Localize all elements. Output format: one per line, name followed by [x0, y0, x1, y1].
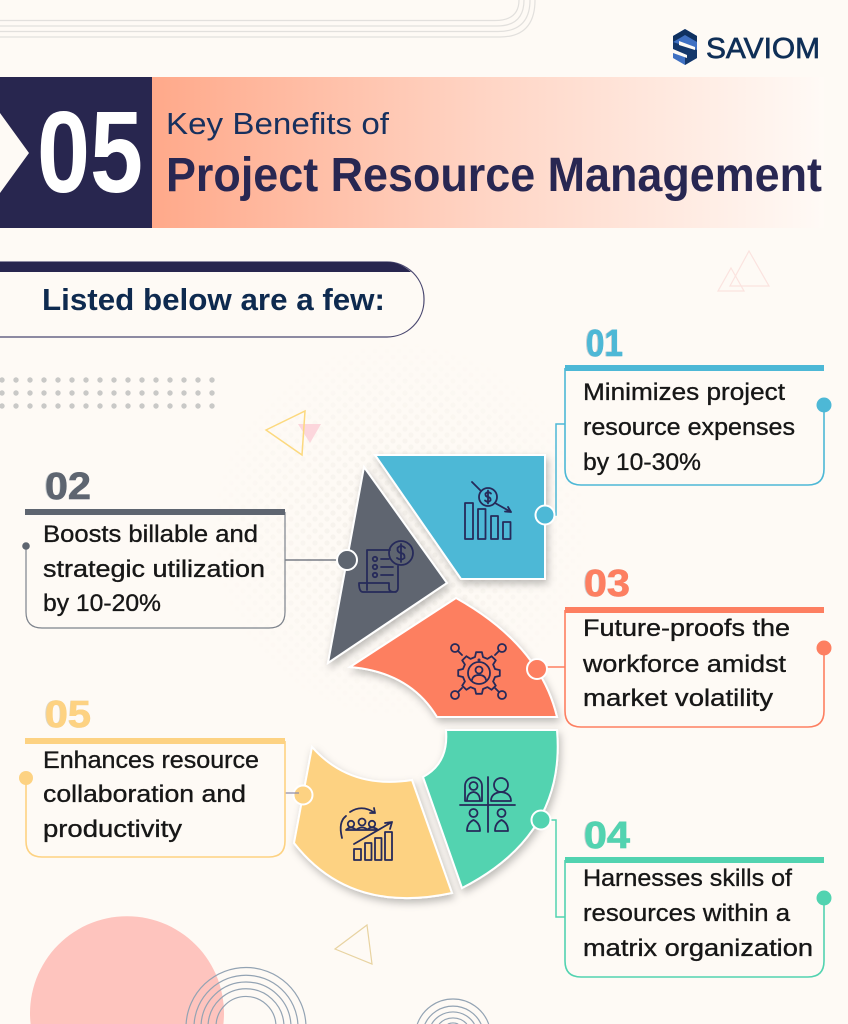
card 05 [19, 694, 312, 857]
connector 03 [527, 659, 565, 679]
decorative top corner lines [0, 0, 535, 37]
decorative pink circle and rings [30, 916, 489, 1024]
card 03: market volatility [583, 685, 773, 712]
title banner: 05 [37, 87, 143, 217]
card 05: Enhances resource [43, 747, 259, 774]
title banner: Project Resource Management [166, 149, 822, 202]
card 03: workforce amidst [582, 651, 786, 678]
card 02: by 10-20% [43, 590, 161, 617]
card 03: 03 [583, 563, 630, 605]
card 02: strategic utilization [43, 556, 265, 583]
connector 05 [285, 786, 312, 804]
decorative triangles [266, 251, 769, 964]
connector 01 [536, 424, 565, 524]
card 03: Future-proofs the [583, 615, 790, 642]
card 02: Boosts billable and [43, 521, 258, 548]
card 04: 04 [583, 815, 630, 857]
card 03 [527, 563, 832, 727]
card 04: resources within a [583, 900, 791, 927]
connector 02 [285, 550, 357, 570]
icon: matrix team [460, 777, 515, 832]
segment 2: gray [328, 467, 447, 663]
title banner [0, 77, 824, 228]
logo: Saviom [673, 29, 820, 65]
icon: falling cost chart [465, 482, 511, 539]
card 04 [532, 810, 832, 977]
icon: workforce gear [451, 644, 506, 699]
card 05: productivity [43, 816, 182, 843]
card 01: Minimizes project [583, 379, 785, 406]
card 04: Harnesses skills of [583, 865, 792, 892]
card 01: 01 [586, 323, 623, 365]
subheading pill: Listed below are a few: [42, 282, 385, 317]
icon: billing document [359, 541, 413, 592]
card 02: 02 [45, 466, 91, 508]
title banner: Key Benefits of [166, 106, 389, 141]
card 03: 03 [584, 563, 630, 605]
segment 5: yellow [294, 747, 452, 898]
card 01: by 10-30% [583, 449, 701, 476]
icon: team productivity [341, 808, 392, 860]
card 04: 04 [584, 815, 630, 857]
card 02 [22, 466, 357, 628]
card 05: 05 [44, 694, 91, 736]
segment 1: blue [375, 455, 545, 579]
card 01: resource expenses [583, 414, 795, 441]
subheading pill [0, 262, 424, 337]
card 02: 02 [44, 466, 91, 508]
logo: Saviom: SAVIOM [706, 33, 820, 65]
decorative dot grid [0, 377, 215, 409]
card 01 [536, 323, 832, 524]
card 01: 01 [585, 323, 622, 365]
segment 4: teal [423, 730, 558, 888]
card 05: 05 [45, 694, 91, 736]
segment 3: coral [350, 598, 557, 717]
connector 04 [532, 810, 565, 917]
card 05: collaboration and [43, 781, 246, 808]
card 04: matrix organization [583, 935, 813, 962]
